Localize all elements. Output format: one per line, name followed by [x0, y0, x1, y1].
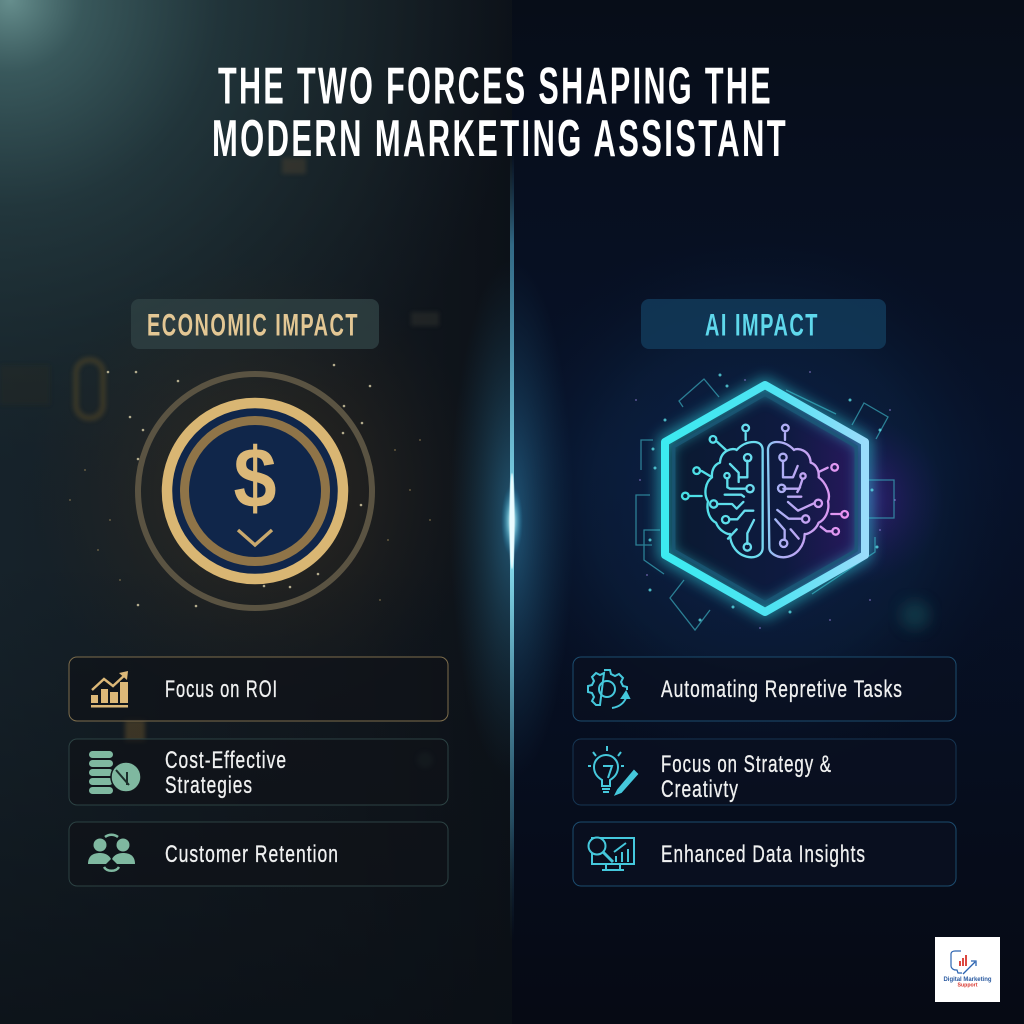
icon: coin stack with falling clock — [89, 751, 141, 794]
card: Automating Repretive Tasks: Automating Repretive Tasks — [661, 676, 903, 703]
logo: Digital Marketing Support: Support — [958, 982, 978, 988]
icon: gold coin with dollar sign and down chevron — [70, 365, 430, 608]
logo: Digital Marketing Support — [935, 937, 1000, 1002]
card: Automating Repretive Tasks — [573, 657, 956, 721]
icon: rising bar chart — [91, 671, 128, 708]
card: Cost-Effective Strategies — [69, 739, 448, 805]
card: Customer Retention — [69, 822, 448, 886]
logo: Digital Marketing Support: Digital Marketing — [944, 976, 992, 983]
icon: lightbulb and pencil — [588, 746, 637, 794]
badge: economic impact: ECONOMIC IMPACT — [147, 306, 359, 342]
card: Enhanced Data Insights — [573, 822, 956, 886]
card: Focus on ROI: Focus on ROI — [165, 676, 278, 703]
card: Focus on Strategy & Creativity: Creativty — [661, 776, 739, 803]
left hemisphere — [705, 442, 763, 557]
background: right half — [480, 0, 1024, 1024]
badge: AI impact: AI IMPACT — [705, 306, 819, 342]
icon: gold coin with dollar sign and down chevron: $ — [234, 430, 276, 526]
right hemisphere — [768, 442, 829, 557]
icon: gear with cycle arrow — [588, 670, 629, 708]
card: Focus on Strategy & Creativity — [573, 739, 956, 805]
center divider with light flare — [450, 150, 574, 940]
card: Focus on Strategy & Creativity: Focus on Strategy & — [661, 751, 832, 778]
card: Customer Retention: Customer Retention — [165, 841, 339, 868]
icon: neon hexagon with circuit brain — [636, 372, 895, 630]
card: Enhanced Data Insights: Enhanced Data Insights — [661, 841, 866, 868]
title — [212, 58, 788, 168]
background: left half — [0, 0, 512, 1024]
card: Cost-Effective Strategies: Cost-Effective — [165, 747, 287, 774]
card: Cost-Effective Strategies: Strategies — [165, 772, 253, 799]
badge: economic impact — [131, 299, 379, 349]
card: Focus on ROI — [69, 657, 448, 721]
badge: AI impact — [641, 299, 886, 349]
icon: monitor with magnifier and chart — [588, 838, 634, 870]
icon: two customers in a loop — [88, 835, 135, 871]
